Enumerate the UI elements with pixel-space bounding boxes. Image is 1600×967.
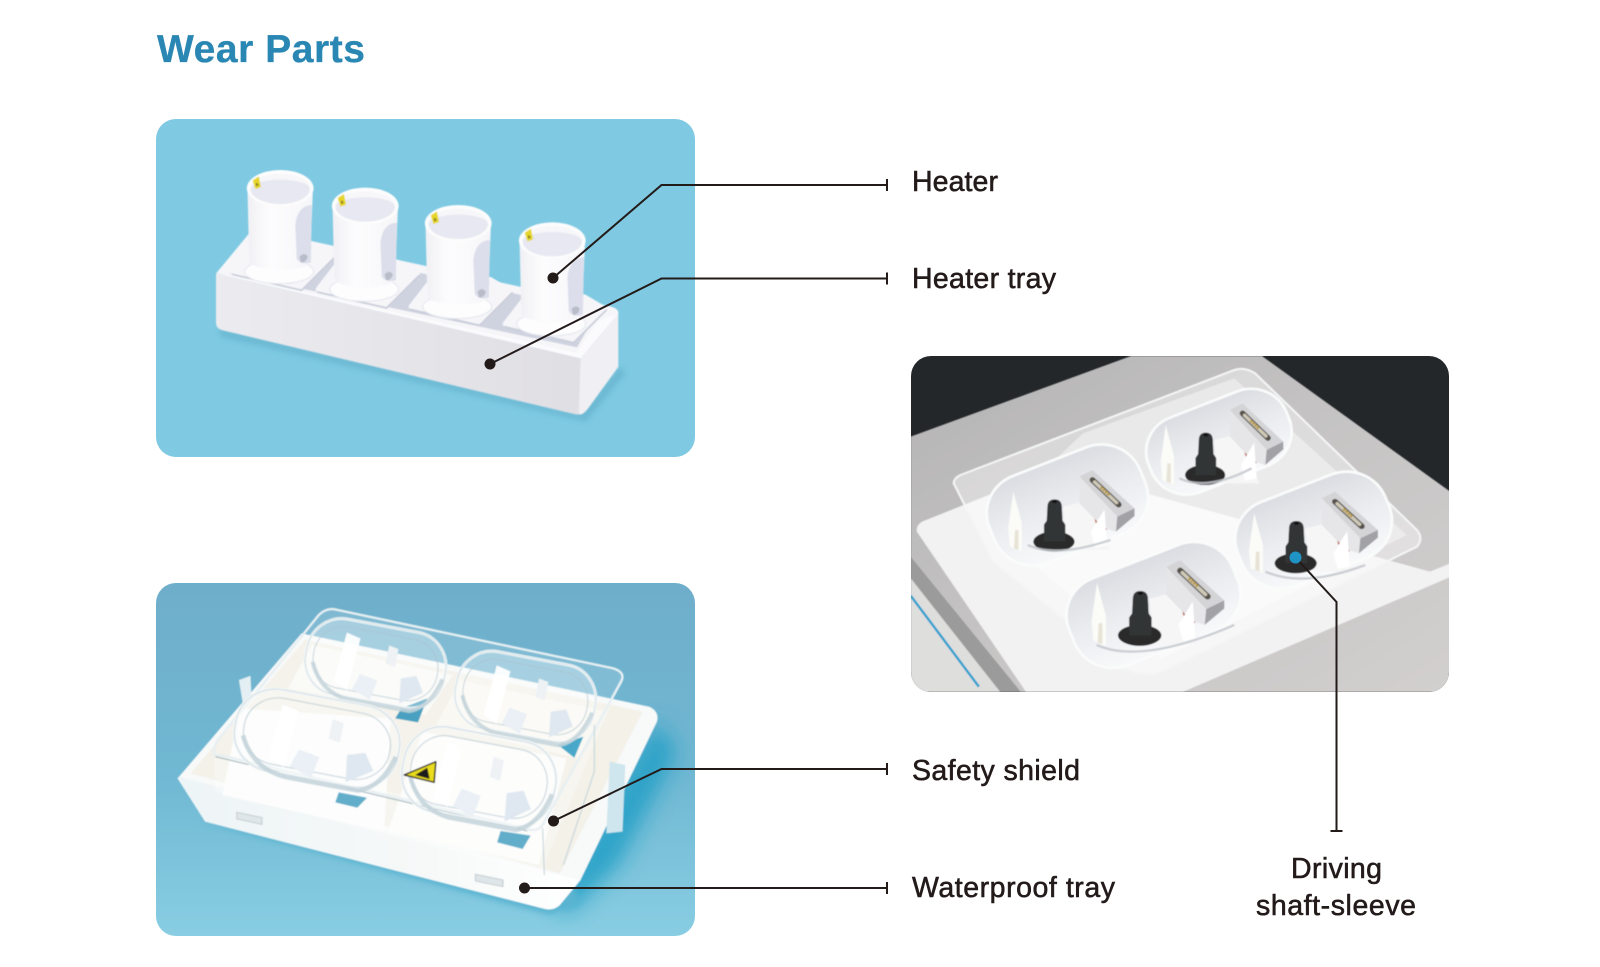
shaft unit bottom: [1092, 560, 1224, 646]
bowl top-left: [988, 443, 1149, 554]
bowl top-right: [1145, 387, 1294, 496]
bowl bottom-left: [232, 688, 402, 794]
callout: heater: [548, 166, 998, 284]
callout: heater tray: [484, 263, 1057, 370]
callout: safety shield: [548, 755, 1080, 826]
tray slots: [237, 812, 262, 824]
label: safety shield: Safety shield: [912, 755, 1080, 787]
bowl bottom-right: [1236, 470, 1394, 580]
lower shadow: [202, 822, 580, 915]
machine front edge: [911, 557, 1021, 692]
title: Wear Parts: [157, 28, 365, 71]
bowl bottom-left: [1067, 543, 1238, 668]
side tabs: [239, 676, 625, 833]
warning sticker: [404, 762, 436, 782]
label: waterproof tray: Waterproof tray: [912, 872, 1116, 904]
tray blue shadow: [553, 722, 677, 915]
tray and shield product: [178, 609, 677, 915]
tray shadow: [219, 328, 625, 422]
label: driving shaft-sleeve: Driving: [1291, 853, 1382, 885]
machine top: [911, 356, 1455, 692]
panel: driving shaft-sleeve photo: [911, 356, 1455, 692]
callout: driving shaft-sleeve: [1256, 552, 1416, 922]
tray front walls: [216, 273, 618, 414]
callout: waterproof tray: [519, 872, 1116, 904]
label: heater: Heater: [912, 166, 998, 198]
bowl top-right: [454, 648, 598, 748]
shaft unit top-left: [1008, 470, 1135, 552]
shaft unit top-right: [1161, 403, 1283, 485]
label: heater tray: Heater tray: [912, 263, 1057, 295]
heater and tray product: [216, 170, 625, 422]
safety shield: [214, 609, 622, 875]
shaft-sleeve product: [911, 356, 1455, 692]
clear tray: [954, 369, 1420, 680]
bowl bottom-right: [400, 726, 558, 833]
heater tray body: [216, 228, 618, 358]
heater cup 2: [317, 188, 420, 308]
base plate: [916, 494, 1449, 692]
heater cup 1: [232, 170, 335, 290]
shaft unit right: [1249, 492, 1378, 573]
panel: tray and shield photo: [156, 583, 695, 936]
bowl top-left: [304, 616, 448, 714]
heater cup 3: [410, 205, 513, 325]
islands and windows: [222, 645, 608, 865]
heater cup 4: [504, 222, 607, 343]
label: driving shaft-sleeve: shaft-sleeve: [1256, 890, 1416, 922]
tray rim reflections: [1028, 468, 1365, 652]
panel: heater photo: [156, 119, 695, 457]
waterproof tray: [178, 633, 658, 909]
